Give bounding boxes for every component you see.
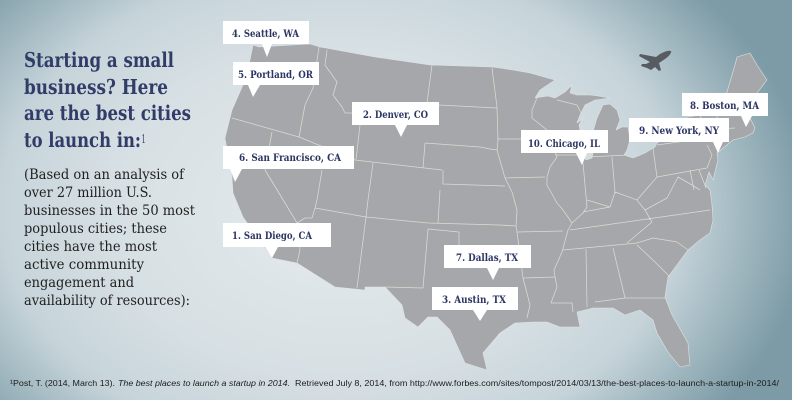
heading (24, 48, 191, 152)
callout: New York (629, 118, 729, 153)
callout: Denver: 2. Denver, CO (363, 109, 428, 121)
heading: are the best cities (24, 101, 191, 125)
callout: San Diego: 1. San Diego, CA (232, 230, 313, 242)
footnote: Retrieved July 8, 2014, from http://www.forbes.com/sites/tompost/2014/03/13/the-best-places-to-launch-a-startup-in-2014/ (295, 378, 780, 388)
callout: San Francisco: 6. San Francisco, CA (239, 152, 342, 164)
callout: Denver (352, 102, 439, 137)
map of the United States (225, 44, 767, 370)
callout: San Francisco (223, 146, 354, 182)
description text: cities have the most (24, 239, 157, 255)
state borders (232, 47, 735, 318)
callout: Austin (432, 287, 518, 321)
description text: populous cities; these (24, 221, 167, 237)
heading: 1 (142, 132, 146, 147)
description text (24, 167, 195, 309)
callout: Boston: 8. Boston, MA (690, 100, 760, 112)
description text: active community (24, 257, 144, 273)
callout: Dallas: 7. Dallas, TX (456, 252, 519, 264)
callout: Boston (682, 93, 768, 127)
callout: Seattle: 4. Seattle, WA (232, 28, 300, 40)
description text: engagement and (24, 275, 134, 291)
footnote: ¹Post, T. (2014, March 13). (10, 378, 115, 388)
description text: businesses in the 50 most (24, 203, 195, 219)
callout: Dallas (444, 245, 531, 280)
heading: business? Here (24, 75, 168, 99)
callout: Portland: 5. Portland, OR (238, 69, 313, 81)
footnote: The best places to launch a startup in 2014. (118, 378, 290, 388)
callout: Chicago (521, 130, 608, 165)
description text: over 27 million U.S. (24, 185, 152, 201)
description text: availability of resources): (24, 293, 190, 309)
callout: San Diego (223, 223, 331, 258)
callout: Chicago: 10. Chicago, IL (528, 138, 600, 150)
heading: to launch in: (24, 128, 141, 152)
callout: Portland (233, 62, 319, 97)
description text: (Based on an analysis of (24, 167, 186, 183)
icon: airplane (639, 51, 671, 71)
callout: New York: 9. New York, NY (639, 125, 719, 137)
callout: Austin: 3. Austin, TX (442, 294, 507, 306)
map land mass (225, 44, 767, 370)
callout: Seattle (223, 21, 309, 57)
heading: Starting a small (24, 48, 174, 72)
footnote (10, 378, 780, 388)
